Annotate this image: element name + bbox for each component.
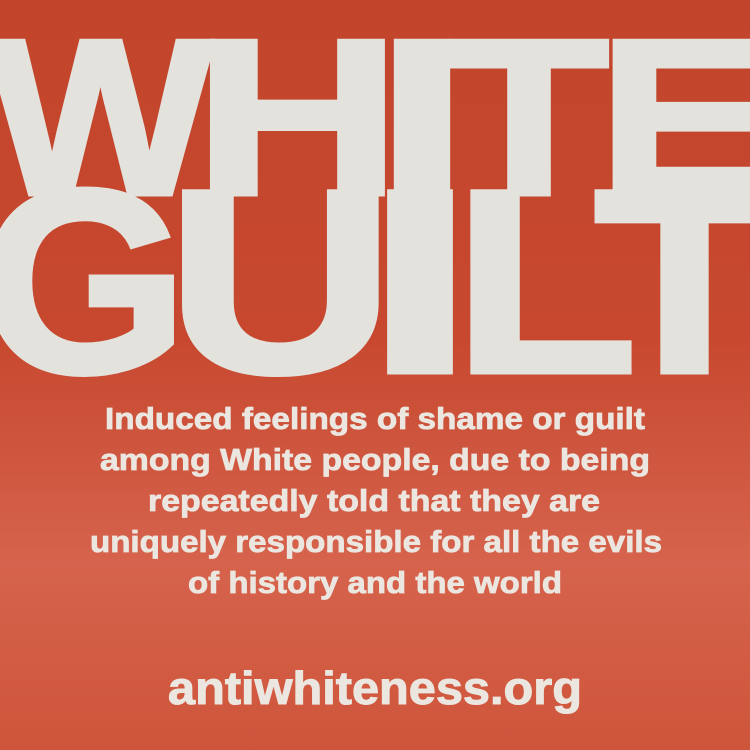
url: antiwhiteness.org [168, 662, 582, 714]
title: WHITE: H [194, 0, 401, 242]
definition text: among White people, due to being [100, 442, 650, 477]
definition text: repeatedly told that they are [148, 483, 600, 518]
title: GUILT: L [453, 135, 638, 428]
title: GUILT: T [594, 135, 750, 428]
title: GUILT: U [166, 135, 395, 428]
title: WHITE [0, 0, 750, 242]
title: WHITE: E [598, 0, 750, 242]
definition text: uniquely responsible for all the evils [90, 524, 662, 559]
definition text [90, 401, 662, 600]
title: WHITE: T [449, 0, 609, 242]
definition text: Induced feelings of shame or guilt [105, 401, 645, 436]
title: GUILT [0, 135, 750, 428]
title: GUILT: I [364, 135, 476, 428]
title: WHITE: I [375, 0, 469, 242]
definition text: of history and the world [188, 565, 562, 600]
